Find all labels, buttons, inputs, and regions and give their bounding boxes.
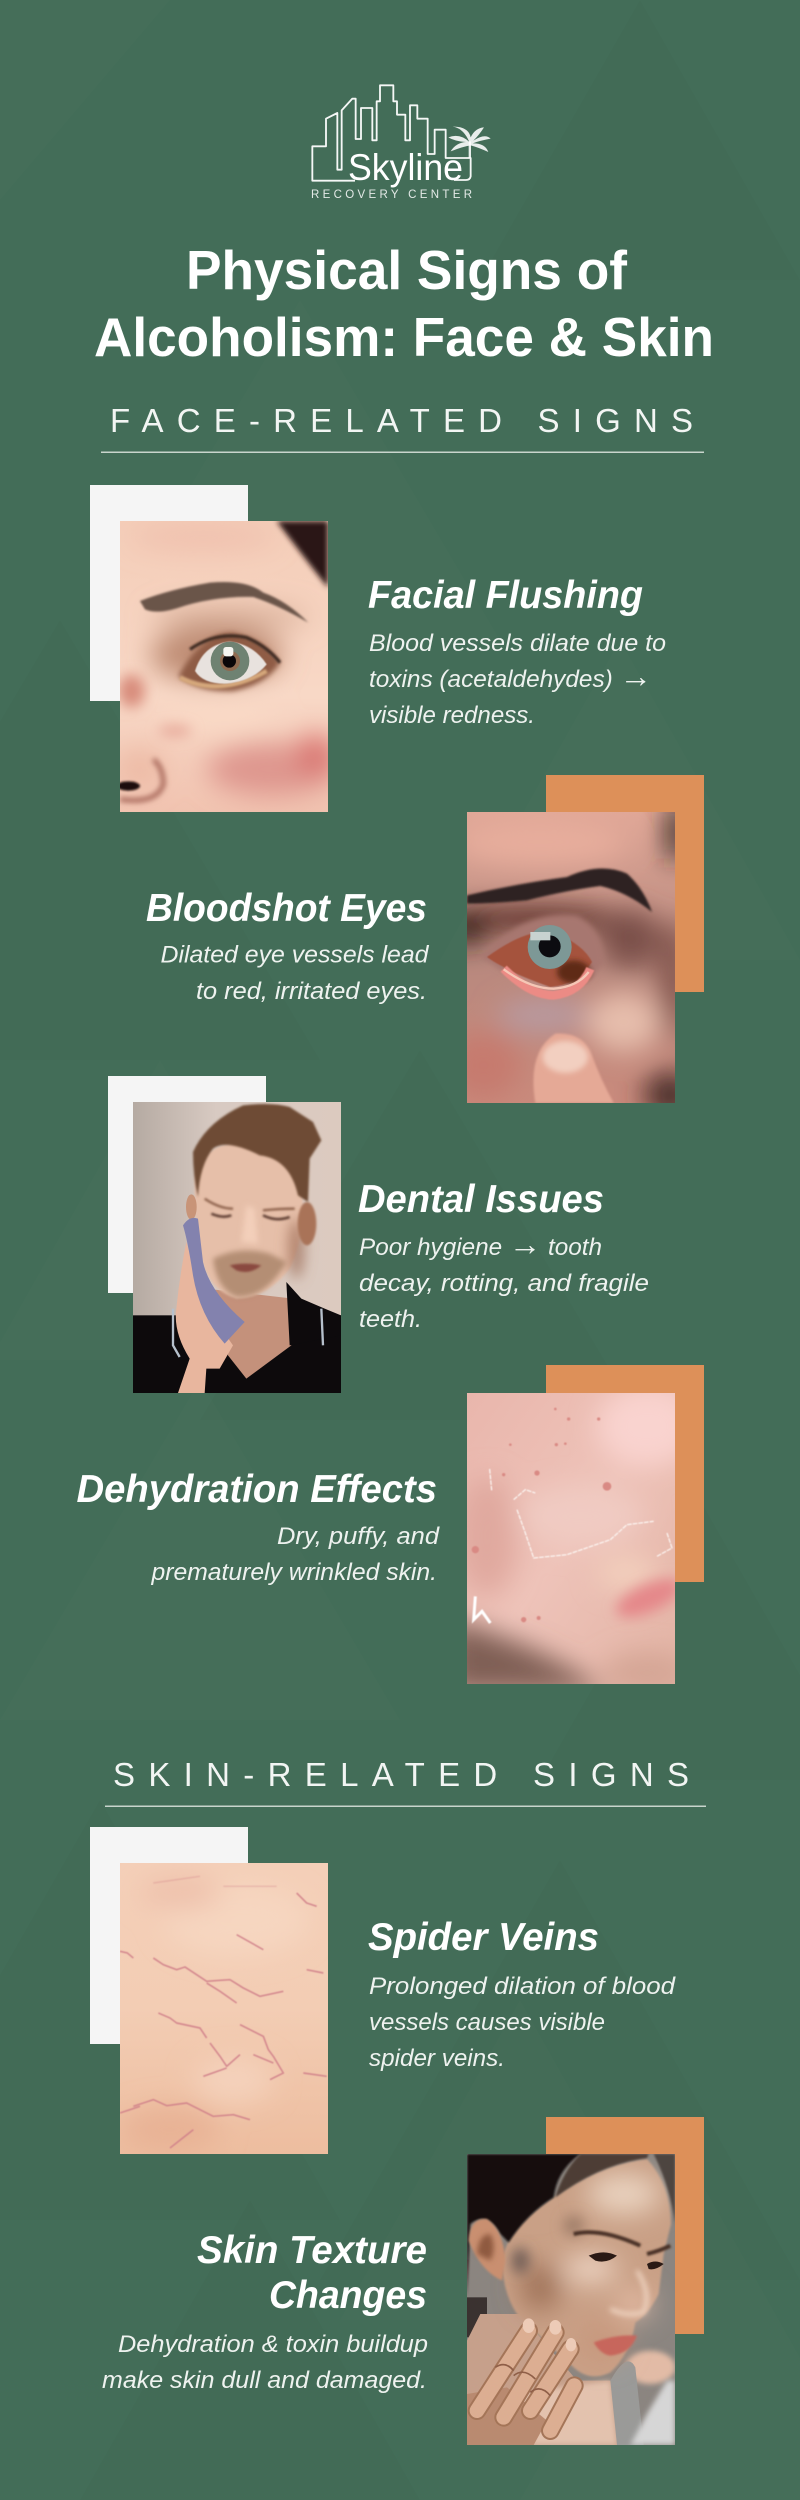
description: Bloodshot Eyes: Dilated eye vessels lead: [160, 942, 429, 968]
description: Dental Issues: decay, rotting, and fragile: [359, 1270, 649, 1297]
description: Bloodshot Eyes: to red, irritated eyes.: [196, 978, 427, 1005]
photo: woman with damaged skin: [467, 2154, 675, 2445]
title: [94, 239, 714, 368]
icon: city skyline outline: [312, 85, 471, 181]
description: Spider Veins: Prolonged dilation of blood: [369, 1973, 676, 2000]
description: Dehydration Effects: Dry, puffy, and: [277, 1523, 440, 1550]
heading: Dental Issues: Dental Issues: [358, 1178, 604, 1221]
heading: Skin Texture Changes: Skin Texture: [197, 2229, 427, 2272]
description: Dental Issues: [359, 1226, 649, 1333]
photo: bloodshot eye: [467, 812, 675, 1103]
white backing rectangle: [108, 1076, 266, 1293]
description: Skin Texture Changes: make skin dull and damaged.: [102, 2367, 427, 2394]
description: Dental Issues: teeth.: [359, 1306, 422, 1333]
section heading: face-related signs: FACE-RELATED SIGNS: [110, 402, 693, 439]
description: Spider Veins: spider veins.: [369, 2045, 505, 2072]
orange backing rectangle: [546, 1365, 704, 1582]
description: Facial Flushing: toxins (acetaldehydes) →: [369, 658, 652, 694]
logo wordmark: Skyline: [348, 147, 463, 188]
description: Spider Veins: [369, 1973, 676, 2072]
heading: Spider Veins: Spider Veins: [368, 1916, 599, 1959]
section heading: skin-related signs: SKIN-RELATED SIGNS: [113, 1756, 689, 1793]
heading: Dehydration Effects: Dehydration Effects: [76, 1468, 437, 1511]
description: Spider Veins: vessels causes visible: [369, 2009, 605, 2036]
photo: dry flaking skin: [467, 1393, 675, 1684]
photo: spider veins on skin: [120, 1863, 328, 2154]
description: Skin Texture Changes: [102, 2331, 428, 2394]
photo: man with toothache: [133, 1102, 341, 1393]
title: Physical Signs of: [186, 239, 628, 301]
panel: spider veins: [90, 1827, 676, 2154]
heading: Skin Texture Changes: [197, 2229, 427, 2317]
icon: palm tree: [448, 127, 491, 158]
panel: dental issues: [108, 1076, 649, 1393]
panel: facial flushing: [90, 485, 666, 812]
white backing rectangle: [90, 1827, 248, 2044]
description: Skin Texture Changes: Dehydration & toxin buildup: [118, 2331, 428, 2358]
photo: flushed face close-up: [117, 521, 340, 812]
description: Facial Flushing: [369, 630, 666, 729]
panel: dehydration effects: [76, 1365, 704, 1693]
white backing rectangle: [90, 485, 248, 701]
orange backing rectangle: [546, 2117, 704, 2334]
panel: bloodshot eyes: [146, 775, 704, 1119]
description: Dehydration Effects: prematurely wrinkled skin.: [150, 1559, 437, 1586]
orange backing rectangle: [546, 775, 704, 992]
heading: Facial Flushing: Facial Flushing: [368, 574, 643, 617]
description: Dehydration Effects: [150, 1523, 440, 1586]
heading: Bloodshot Eyes: Bloodshot Eyes: [146, 887, 427, 930]
logo tagline: RECOVERY CENTER: [311, 189, 472, 201]
description: Facial Flushing: Blood vessels dilate due to: [369, 630, 666, 657]
title: Alcoholism: Face & Skin: [94, 306, 714, 368]
description: Dental Issues: Poor hygiene → tooth: [359, 1226, 602, 1262]
panel: skin texture changes: [102, 2117, 704, 2445]
description: Facial Flushing: visible redness.: [369, 702, 535, 729]
logo: Skyline Recovery Center: [311, 85, 491, 201]
description: Bloodshot Eyes: [160, 942, 429, 1005]
heading: Skin Texture Changes: Changes: [269, 2274, 427, 2317]
